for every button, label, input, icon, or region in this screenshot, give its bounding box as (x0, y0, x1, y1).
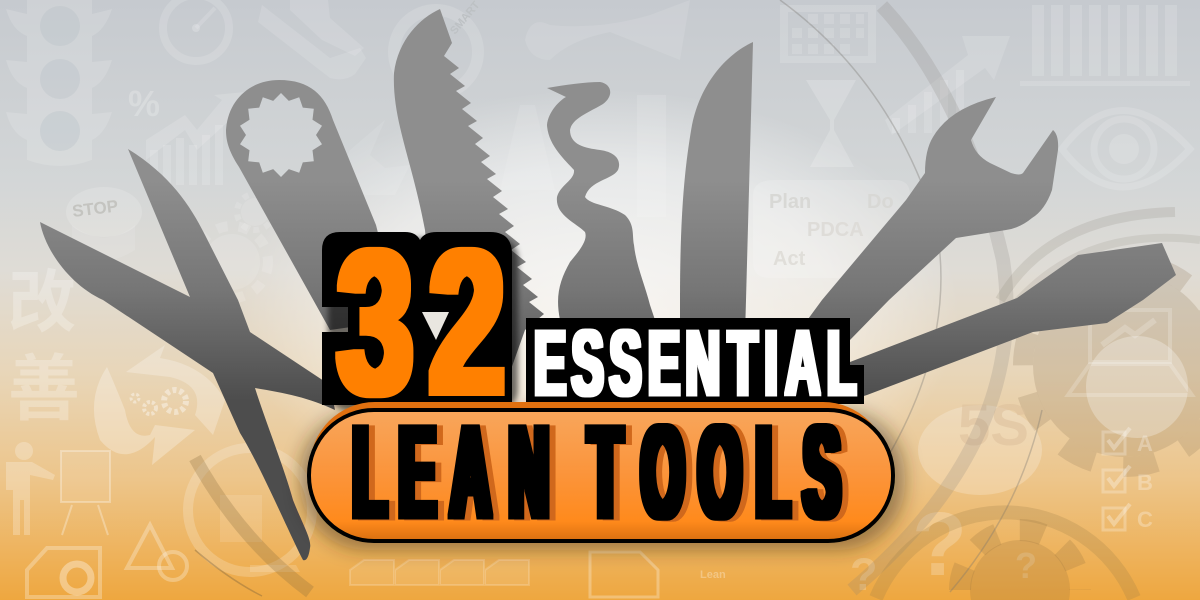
icon: hourglass (806, 80, 856, 167)
icon: checklist A B C (1103, 428, 1153, 532)
icon: checklist A B C: A (1137, 431, 1153, 456)
icon: recycle arrows with gears (94, 345, 225, 465)
icon: PDCA cycle (753, 180, 910, 278)
icon: large gear right (1023, 263, 1200, 467)
icon: document with gear (27, 548, 100, 597)
icon: PDCA cycle: Plan (769, 191, 811, 213)
icon: checklist A B C: B (1137, 470, 1153, 495)
word ESSENTIAL: ESSENTIAL (534, 311, 856, 415)
icon: stop button (66, 187, 142, 261)
icon: 5S (918, 393, 1042, 495)
icon: question marks (850, 495, 1037, 600)
icon: PDCA cycle: PDCA (807, 219, 864, 241)
icon: shoe on ramp (258, 0, 366, 79)
icon: thermometer scale (637, 95, 666, 217)
numeral 32: 32 (337, 207, 505, 436)
icon: percent: % (128, 83, 160, 124)
icon: cube blocks (350, 560, 529, 585)
icon: SMART ring (394, 0, 483, 94)
tool: knife blade (680, 42, 753, 335)
icon: checklist document (590, 552, 658, 597)
tool: bottle opener key (226, 80, 400, 330)
icon: gauge (163, 0, 229, 61)
orange pill back edge (310, 402, 888, 532)
orange pill (309, 410, 893, 541)
icon: question marks: ? (850, 549, 878, 600)
tool: scissors (40, 149, 335, 560)
icon: kanji kaizen (8, 265, 80, 430)
icon: lower gear right (960, 530, 1080, 600)
icon: magnifier with trash can (188, 448, 312, 572)
icon: question marks: ? (912, 495, 967, 595)
icon: kanji kaizen: 改 (8, 265, 76, 341)
icon: PDCA cycle: Do (867, 191, 894, 213)
icon: laptop chart (1068, 310, 1192, 395)
icon: SMART ring: SMART (448, 0, 483, 37)
tool: corkscrew (547, 82, 660, 335)
icon: warning with clock (127, 525, 187, 580)
icon: kanji kaizen: 善 (8, 350, 80, 430)
words LEAN TOOLS shadow: LEAN TOOLS (359, 401, 846, 547)
icon: check mark with arrow (340, 120, 410, 195)
icon: calendar (780, 5, 876, 63)
icon: rising chart (146, 92, 245, 185)
icon: horn shape (525, 0, 690, 60)
icon: PDCA cycle: Act (773, 248, 806, 270)
icon: light disc (1086, 336, 1188, 438)
tool: wrench (800, 97, 1058, 340)
icon: gears centre-left (196, 194, 273, 298)
icon: rising arrow chart (885, 36, 1010, 135)
icon: stop button: STOP (71, 197, 119, 221)
tool: screwdriver (845, 243, 1176, 402)
icon: metronome (500, 105, 555, 190)
icon: checklist A B C: C (1137, 507, 1153, 532)
tool: saw blade (394, 9, 544, 400)
icon: question marks: ? (1015, 545, 1037, 586)
title lockup (300, 207, 905, 550)
icon: barcode bars (1020, 5, 1190, 86)
icon: 5S: 5S (958, 393, 1029, 458)
icon: eye (1062, 110, 1190, 187)
icon: traffic light (6, 0, 112, 166)
shadow under title (300, 410, 905, 550)
icon: flow note: Lean (700, 569, 726, 581)
words LEAN TOOLS: LEAN TOOLS (353, 400, 840, 546)
icon: presenter with easel (6, 442, 110, 535)
